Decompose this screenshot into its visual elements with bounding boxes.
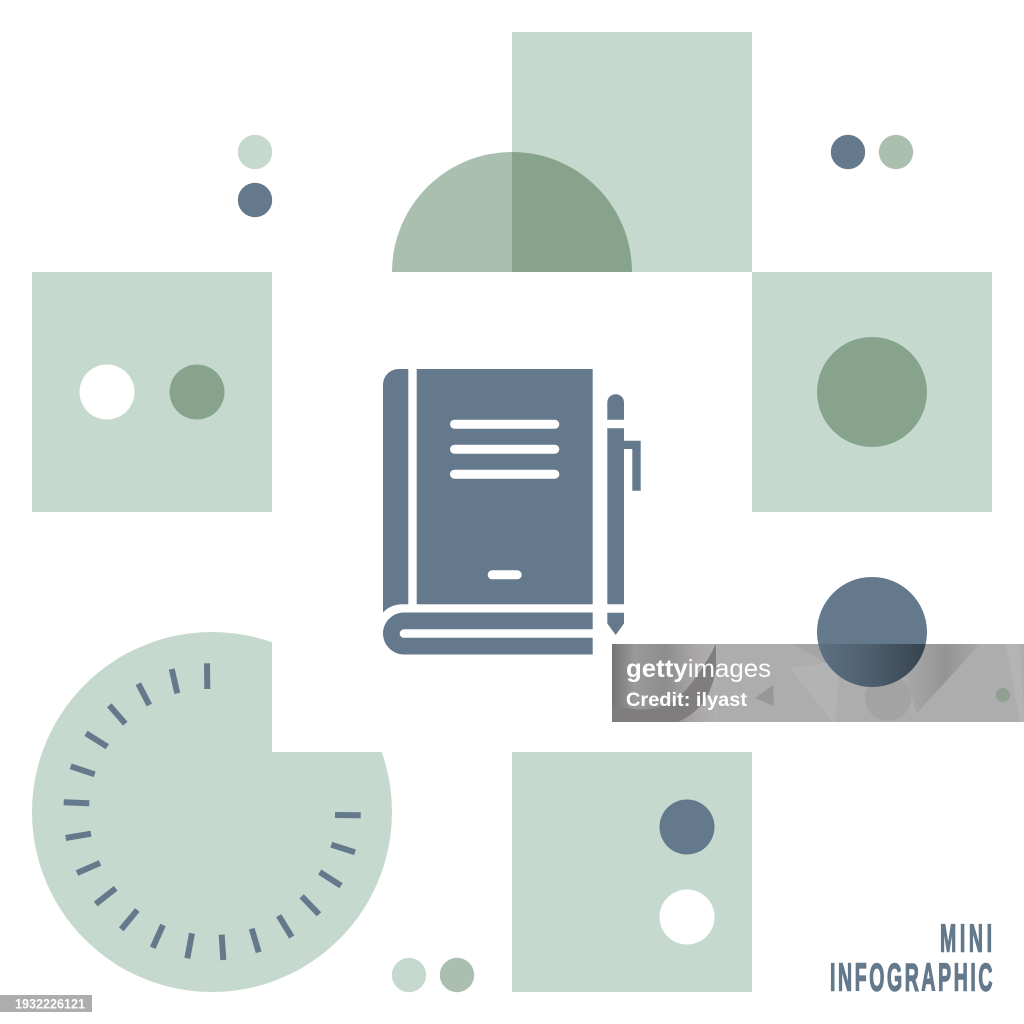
title: mini infographic <box>830 916 992 999</box>
pen <box>607 394 641 635</box>
half circle left part <box>392 152 512 272</box>
panel: right square with circle <box>752 272 992 512</box>
dot pair: bottom <box>392 958 474 992</box>
title: mini infographic: INFOGRAPHIC <box>830 955 992 999</box>
panel: bottom square with two circles <box>512 752 752 992</box>
icon: notebook and pen <box>383 369 641 654</box>
watermark banner <box>612 644 1024 722</box>
image id tag: 1932226121 <box>15 996 85 1012</box>
cover text lines <box>450 420 559 579</box>
notebook spine <box>383 369 408 612</box>
panel: left square with two circles <box>32 272 272 512</box>
circle under watermark <box>818 644 926 687</box>
tick marks <box>64 663 361 960</box>
dot pair: top left <box>238 135 272 217</box>
notebook pages base <box>383 612 593 654</box>
chart: dial pie with tick marks <box>32 632 392 992</box>
panel: top square with half circle <box>392 32 752 272</box>
watermark brand text: gettyimages <box>626 655 771 683</box>
title: mini infographic: MINI <box>940 916 992 960</box>
half circle right part <box>512 152 632 272</box>
watermark left sheen <box>612 644 694 722</box>
watermark dark crescent <box>612 644 716 722</box>
watermark credit text: Credit: ilyast <box>626 690 748 711</box>
notebook cover <box>417 369 593 604</box>
dot pair: top right <box>831 135 913 169</box>
circle: blue, right <box>817 577 927 687</box>
watermark shapes <box>755 644 1024 722</box>
